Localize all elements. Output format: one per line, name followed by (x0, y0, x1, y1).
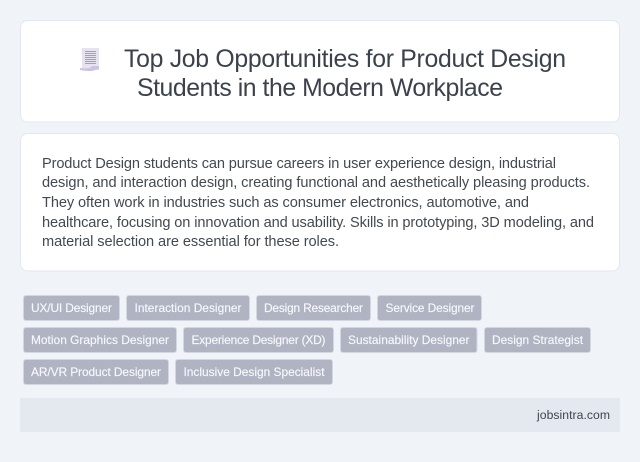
text block: description (42, 156, 594, 250)
tag: Service Designer (378, 296, 482, 320)
tag: AR/VR Product Designer (24, 360, 168, 384)
tag: Interaction Designer: Interaction Designer (134, 301, 242, 315)
footer (20, 398, 620, 432)
text block: description: design, and interaction design, creating functional and aesthetically pleasing products. (42, 175, 590, 191)
tag: Sustainability Designer: Sustainability Designer (348, 333, 470, 347)
tag: Service Designer: Service Designer (386, 301, 475, 315)
tag: Motion Graphics Designer (24, 328, 176, 352)
title (124, 46, 566, 102)
tag: Design Researcher: Design Researcher (264, 301, 363, 315)
title: Top Job Opportunities for Product Design (124, 46, 566, 73)
tag: Experience Designer (XD): Experience Designer (XD) (192, 333, 326, 347)
tag: Inclusive Design Specialist: Inclusive Design Specialist (184, 365, 325, 379)
tag: Design Researcher (256, 296, 370, 320)
tag: Motion Graphics Designer: Motion Graphics Designer (31, 333, 169, 347)
tag: Interaction Designer (126, 296, 250, 320)
tag: UX/UI Designer: UX/UI Designer (31, 301, 112, 315)
tag: AR/VR Product Designer: AR/VR Product Designer (31, 365, 161, 379)
tag: Design Strategist (484, 328, 590, 352)
icon: document scroll (80, 48, 99, 71)
tag: Experience Designer (XD) (184, 328, 334, 352)
title: Students in the Modern Workplace (137, 75, 503, 102)
panel: description (20, 134, 620, 271)
tag: Design Strategist: Design Strategist (492, 333, 584, 347)
footer source text: jobsintra.com (536, 408, 610, 422)
tag: Sustainability Designer (340, 328, 477, 352)
text block: description: They often work in industries such as consumer electronics, automotive, and (42, 195, 529, 211)
panel: header (20, 20, 620, 122)
text block: description: material selection are essential for these roles. (42, 234, 339, 250)
tag: UX/UI Designer (24, 296, 120, 320)
tags (24, 296, 590, 384)
text block: description: Product Design students can pursue careers in user experience design, industrial (42, 156, 556, 172)
text block: description: healthcare, focusing on innovation and usability. Skills in prototyping, 3D modeling, and (42, 215, 594, 231)
tag: Inclusive Design Specialist (176, 360, 332, 384)
